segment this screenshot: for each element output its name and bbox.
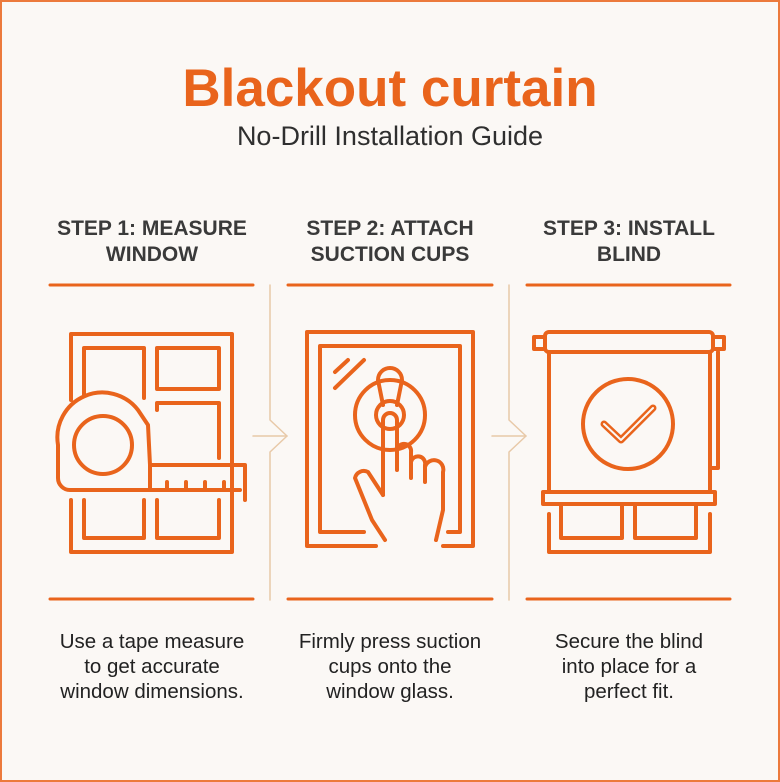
icon: hand pressing suction cup [307, 332, 473, 546]
arrow 2 [492, 285, 526, 600]
heading step 3: BLIND [597, 243, 661, 266]
panel: step 1 [57, 217, 247, 703]
icon: roller blind with check [534, 332, 724, 552]
text step 3 [555, 630, 703, 703]
heading step 2 [306, 217, 474, 266]
heading step 1: STEP 1: MEASURE [57, 217, 247, 240]
heading step 3 [543, 217, 715, 266]
panel: step 3 [543, 217, 715, 703]
text step 2: cups onto the [328, 655, 452, 678]
heading step 1: WINDOW [106, 243, 198, 266]
text step 3: perfect fit. [584, 680, 674, 703]
heading step 2: SUCTION CUPS [311, 243, 469, 266]
text step 2: Firmly press suction [299, 630, 481, 653]
text step 2: window glass. [326, 680, 454, 703]
text step 1 [60, 630, 244, 703]
heading step 1 [57, 217, 247, 266]
heading step 2: STEP 2: ATTACH [306, 217, 474, 240]
text step 1: Use a tape measure [60, 630, 244, 653]
text step 1: window dimensions. [60, 680, 244, 703]
subtitle: No-Drill Installation Guide [237, 121, 543, 151]
text step 3: Secure the blind [555, 630, 703, 653]
text step 2 [299, 630, 481, 703]
text step 1: to get accurate [84, 655, 220, 678]
panel: step 2 [299, 217, 481, 703]
title: Blackout curtain [182, 59, 598, 118]
text step 3: into place for a [562, 655, 696, 678]
icon: window with tape measure [57, 334, 245, 552]
heading step 3: STEP 3: INSTALL [543, 217, 715, 240]
arrow 1 [253, 285, 287, 600]
